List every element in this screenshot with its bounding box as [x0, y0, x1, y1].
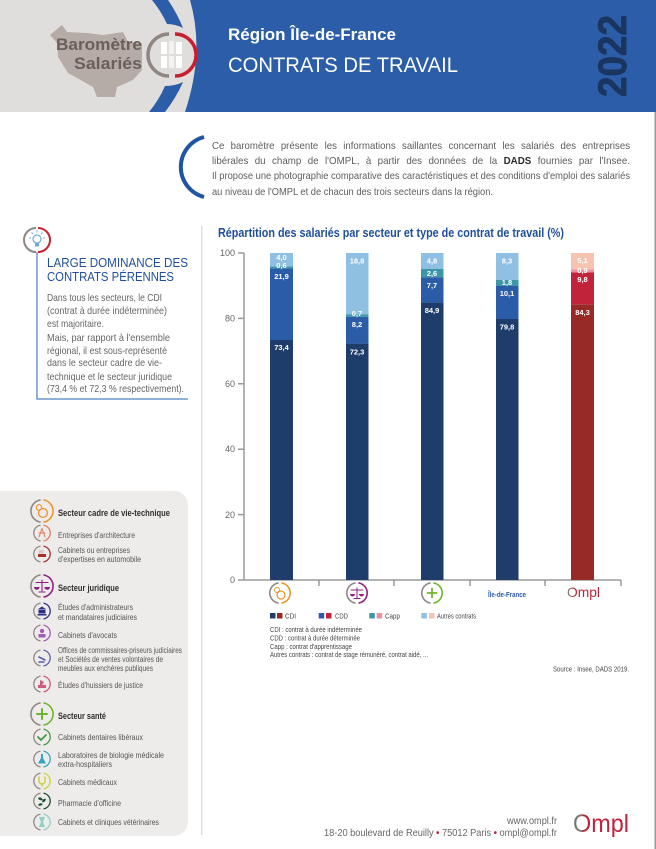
panel: sectors legend	[0, 491, 188, 836]
x icon: cadre de vie	[270, 583, 290, 603]
header banner	[0, 0, 656, 112]
bar: juridique: 0,7	[352, 309, 362, 318]
barometer title: Baromètre	[56, 35, 142, 54]
icon: light bulb	[24, 228, 50, 252]
label: Secteur juridique	[58, 583, 119, 594]
x label: Île-de-France: Île-de-France	[487, 590, 526, 599]
bar: juridique: 8,2	[352, 320, 362, 329]
intro bracket	[181, 137, 204, 197]
item: pharmacie: Pharmacie d'officine	[58, 799, 121, 808]
legend: CDD	[319, 612, 348, 620]
callout body: Dans tous les secteurs, le CDI	[47, 292, 162, 304]
barometer title: Salariés	[74, 54, 142, 73]
callout body: (73,4 % et 72,3 % respectivement).	[47, 383, 184, 395]
bar: santé: 7,7	[427, 281, 437, 290]
bar: OMPL	[571, 253, 594, 580]
y axis labels	[220, 248, 235, 585]
icon: cadre de vie	[31, 500, 53, 522]
item: administrateurs	[34, 603, 137, 622]
icon: scales	[31, 575, 53, 597]
y axis labels: 0	[230, 575, 235, 585]
legend: CDI	[270, 612, 296, 620]
legend: CDD: CDD	[335, 612, 348, 620]
bar: OMPL: 5,1	[577, 256, 588, 265]
item: médicaux	[34, 773, 117, 789]
item: laboratoires: extra-hospitaliers	[58, 760, 112, 769]
footer logo: Ompl	[573, 811, 629, 838]
callout heading	[47, 255, 188, 284]
bar: OMPL: 84,3	[575, 308, 590, 317]
label: Secteur santé	[58, 711, 106, 722]
item: automobile: d'expertises en automobile	[58, 555, 141, 564]
item: architecture	[34, 525, 135, 541]
intro text	[212, 140, 630, 198]
x icon: santé	[422, 583, 442, 603]
chart legend	[270, 612, 476, 620]
website: www.ompl.fr	[506, 816, 558, 827]
address: 18-20 boulevard de Reuilly • 75012 Paris • ompl@ompl.fr	[324, 828, 558, 839]
intro block	[181, 137, 630, 198]
y axis labels: 60	[225, 379, 235, 389]
icon: plus	[31, 703, 53, 725]
blue ring upper segment	[152, 0, 183, 28]
legend: Autres contrats	[421, 612, 476, 620]
sector: juridique	[31, 575, 119, 597]
callout body	[47, 292, 184, 395]
region heading: Région Île-de-France	[228, 25, 396, 44]
item: avocats: Cabinets d'avocats	[58, 631, 117, 640]
bar: OMPL: 9,8	[577, 275, 588, 284]
callout body: est majoritaire.	[47, 318, 104, 330]
sector: cadre de vie-technique	[31, 500, 170, 522]
item: médicaux: Cabinets médicaux	[58, 778, 117, 787]
item: vétérinaires: Cabinets et cliniques vétérinaires	[58, 818, 159, 827]
legend: Capp	[369, 612, 400, 620]
bar: cadre de vie-technique: 21,9	[274, 272, 289, 281]
bar: Île-de-France: 79,8	[500, 322, 514, 332]
bar: santé	[421, 253, 444, 580]
item: commissaires-priseurs: Offices de commissaires-priseurs judiciaires	[58, 646, 182, 655]
source: Source : Insee, DADS 2019.	[553, 664, 629, 674]
bar: santé: 2,6	[427, 269, 437, 278]
x logo: OMPL: Ompl	[567, 584, 600, 600]
contract definitions: Autres contrats : contrat de stage rémunéré, contrat aidé, ...	[270, 650, 428, 659]
x icon: juridique	[347, 583, 367, 603]
bar: cadre de vie-technique: 0,6	[276, 261, 287, 270]
callout heading: LARGE DOMINANCE DES	[47, 255, 188, 270]
y axis labels: 20	[225, 510, 235, 520]
item: administrateurs: Études d'administrateurs	[58, 603, 133, 612]
item: automobile: Cabinets ou entreprises	[58, 546, 130, 555]
callout body: régional, il est sous-représenté	[47, 345, 167, 357]
bar chart	[220, 248, 621, 603]
contract definitions: CDD : contrat à durée déterminée	[270, 634, 360, 642]
bar: Île-de-France	[496, 253, 518, 580]
bar: cadre de vie-technique: 4,0	[276, 253, 287, 262]
map of Île-de-France	[50, 25, 142, 97]
item: commissaires-priseurs	[34, 646, 182, 673]
header blue panel	[185, 0, 656, 112]
intro text: Ce baromètre présente les informations saillantes concernant les salariés des entreprises	[212, 140, 630, 152]
legend: Autres contrats: Autres contrats	[437, 612, 476, 620]
callout: large dominance	[24, 228, 188, 399]
year: 2022	[591, 15, 635, 97]
blue ring lower segment	[149, 82, 183, 112]
bar: juridique	[346, 253, 368, 580]
y axis labels: 80	[225, 314, 235, 324]
bar: santé: 84,9	[425, 306, 439, 315]
bar: Île-de-France: 10,1	[500, 289, 514, 298]
item: vétérinaires	[34, 814, 159, 830]
intro text: libérales du champ de l'OMPL, à partir des données de la DADS fournies par l'Insee.	[212, 155, 630, 167]
bar: Île-de-France: 1,8	[502, 278, 512, 287]
bar: cadre de vie-technique: 73,4	[274, 343, 290, 352]
item: dentaires	[34, 729, 143, 745]
contract definitions: Capp : contrat d'apprentissage	[270, 642, 352, 651]
contract definitions	[270, 625, 428, 659]
callout body: dans le secteur cadre de vie-	[47, 357, 162, 369]
callout body: (contrat à durée indéterminée)	[47, 305, 167, 317]
item: laboratoires	[34, 751, 164, 769]
item: avocats	[34, 625, 117, 641]
footer	[324, 811, 629, 839]
bar: juridique: 72,3	[350, 348, 364, 356]
item: huissiers	[34, 676, 143, 692]
chart title: Répartition des salariés par secteur et type de contrat de travail (%)	[218, 226, 564, 240]
item: huissiers: Études d'huissiers de justice	[58, 681, 143, 690]
item: commissaires-priseurs: et Sociétés de ventes volontaires de	[58, 655, 163, 664]
item: commissaires-priseurs: meubles aux enchères publiques	[58, 664, 153, 673]
y axis labels: 40	[225, 444, 235, 454]
item: administrateurs: et mandataires judiciaires	[58, 613, 137, 622]
barometer logo	[148, 34, 196, 76]
item: automobile	[34, 546, 141, 564]
bar: Île-de-France: 8,3	[502, 256, 512, 266]
callout heading: CONTRATS PÉRENNES	[47, 269, 174, 284]
callout body: Mais, par rapport à l'ensemble	[47, 332, 170, 344]
bar: cadre de vie-technique	[270, 253, 293, 580]
legend: CDI: CDI	[285, 612, 296, 620]
bar: juridique: 18,8	[350, 256, 364, 266]
item: laboratoires: Laboratoires de biologie médicale	[58, 751, 164, 760]
page title: CONTRATS DE TRAVAIL	[228, 54, 458, 77]
sector: santé	[31, 703, 106, 725]
callout body: technique et le secteur juridique	[47, 371, 172, 383]
legend: Capp: Capp	[385, 612, 400, 620]
item: architecture: Entreprises d'architecture	[58, 531, 135, 540]
axes	[238, 253, 621, 586]
item: dentaires: Cabinets dentaires libéraux	[58, 733, 143, 742]
item: pharmacie	[34, 793, 121, 809]
intro text: au niveau de l'OMPL et de chacun des trois secteurs dans la région.	[212, 186, 493, 198]
bar: OMPL: 0,9	[577, 266, 588, 275]
label: Secteur cadre de vie-technique	[58, 508, 170, 519]
barometer title	[56, 35, 142, 73]
y axis labels: 100	[220, 248, 235, 258]
bar: santé: 4,8	[427, 256, 437, 266]
contract definitions: CDI : contrat à durée indéterminée	[270, 625, 362, 634]
